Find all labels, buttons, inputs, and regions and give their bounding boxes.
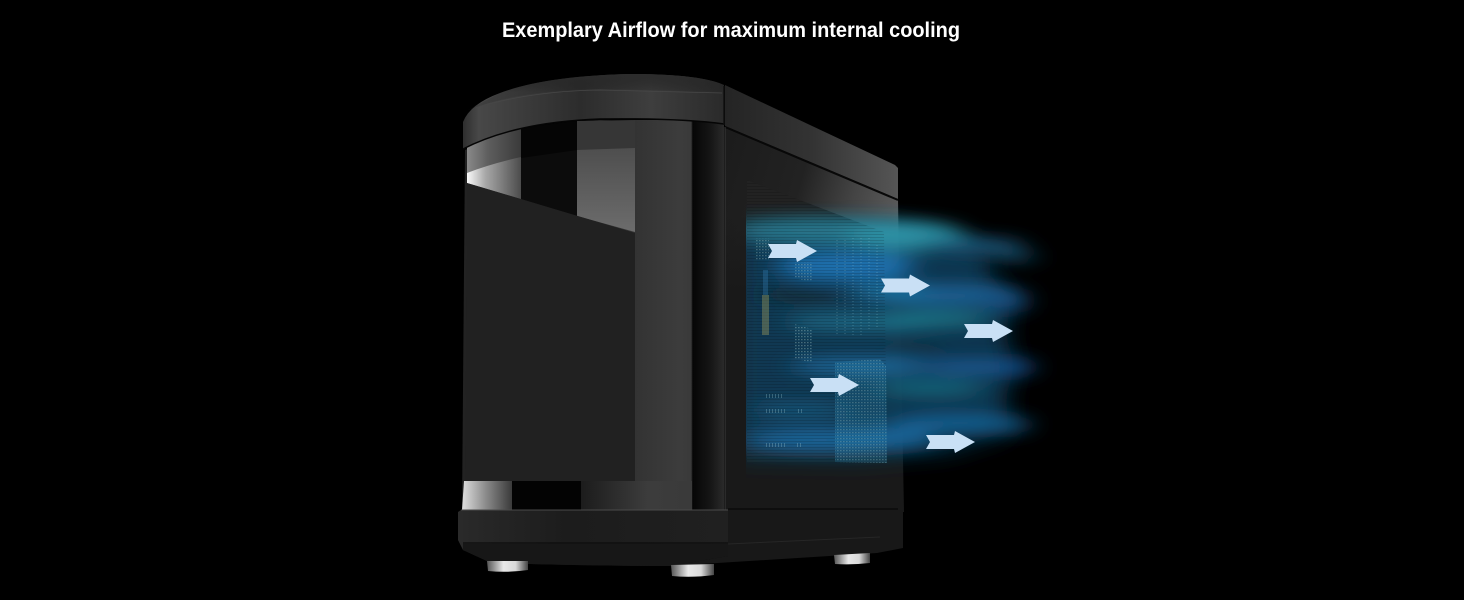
lower dots: [766, 396, 803, 445]
foot centre: [671, 564, 714, 577]
arrow 1: [768, 240, 817, 262]
side panel: [725, 85, 904, 512]
title: Exemplary Airflow for maximum internal cooling: [502, 19, 960, 42]
dark front panel: [465, 183, 635, 481]
airflow arrows: [768, 240, 1013, 453]
foot left: [487, 561, 528, 572]
vent block small: [794, 262, 812, 282]
arrow 5: [926, 431, 975, 453]
arrow 2: [881, 274, 930, 296]
dark reflection band: [521, 121, 577, 216]
side mesh window: [747, 180, 887, 462]
teal lower: [875, 380, 985, 396]
lower left reflection: [462, 481, 512, 510]
airflow cloud: [730, 217, 1037, 458]
vent block dots: [835, 359, 887, 463]
arrow 3: [964, 320, 1013, 342]
foot right: [834, 553, 870, 564]
teal top band: [730, 217, 930, 245]
upper-left dots: [755, 238, 769, 260]
front glass: [462, 120, 724, 510]
mesh overlay: [747, 180, 887, 462]
top cap: [463, 74, 724, 149]
board dots: [837, 238, 877, 335]
RGB strip: [762, 270, 769, 335]
dark gap: [769, 289, 826, 304]
vent block large: [835, 359, 887, 463]
left reflection: [467, 128, 521, 199]
upper grey band: [577, 120, 635, 233]
arrow 4: [810, 374, 859, 396]
base: [458, 509, 903, 566]
infographic canvas: [458, 22, 1048, 577]
vent block upper: [794, 324, 812, 363]
lower right reflection: [581, 481, 692, 510]
teal mid: [785, 313, 935, 331]
feet: [487, 553, 870, 577]
internal components seen through mesh: [755, 238, 887, 463]
vertical pillar: [635, 120, 724, 510]
blue lower mid: [790, 357, 930, 375]
blue upper: [775, 251, 915, 281]
lower dark reflection: [512, 481, 581, 510]
PC case: [458, 74, 904, 577]
blue lower: [750, 402, 850, 418]
